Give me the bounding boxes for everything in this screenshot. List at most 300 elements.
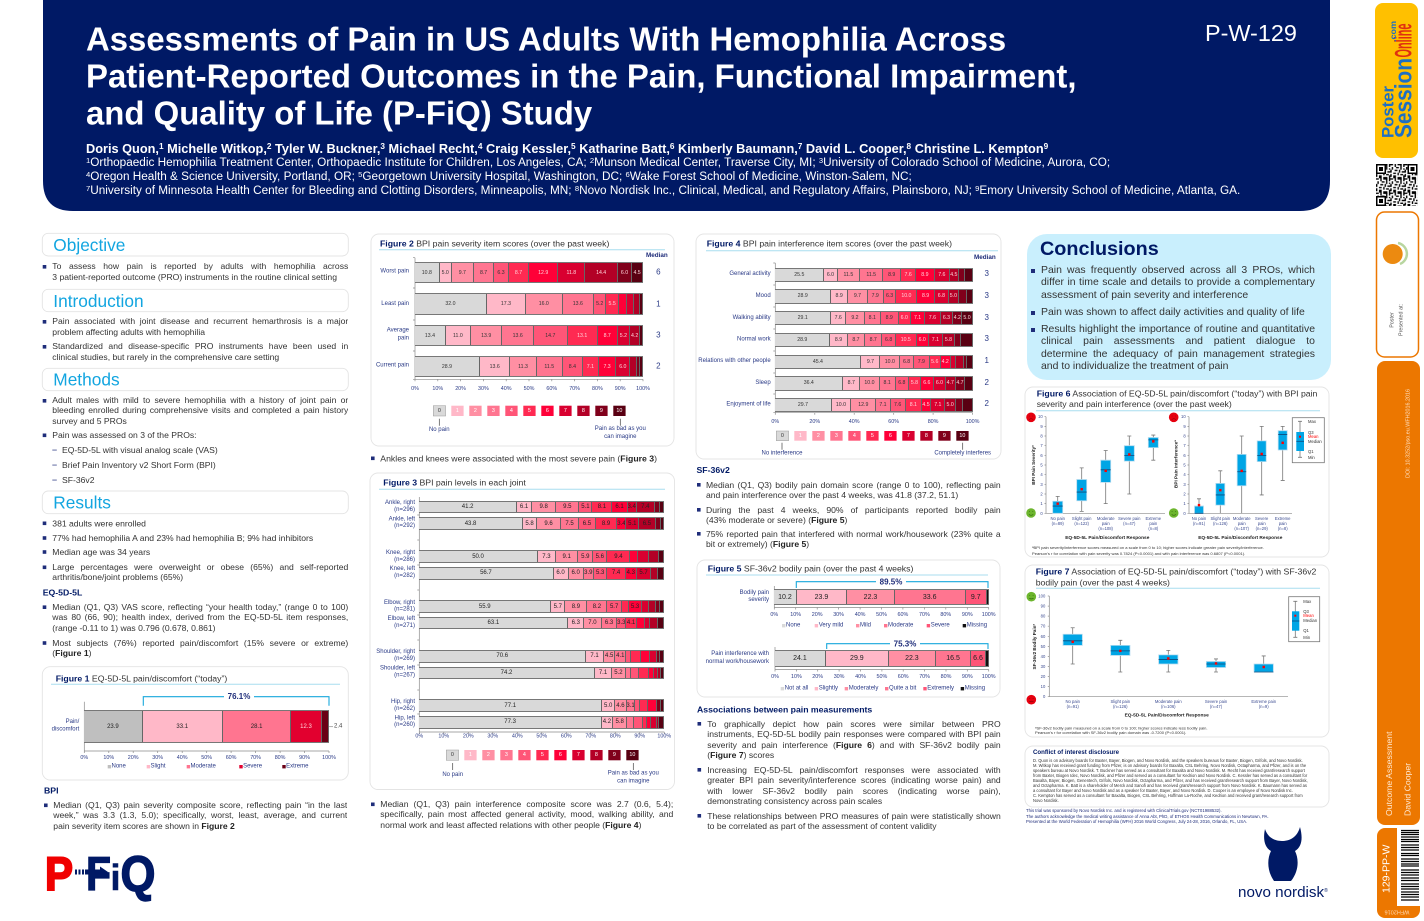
axis labels: 20%: [809, 419, 820, 425]
logo: Novo Nordisk: [1238, 827, 1328, 901]
bar: hip left: Hip, left: [395, 716, 415, 722]
footnote: Pearson’s r for correlation with pain severity was 0.7824 (P<0.0001) and with pain interference was 0.6807 (P<0.0001).: [1032, 551, 1245, 556]
text: EQ-5D-5L bullet 2: (Figure 1): [52, 648, 91, 658]
legend: pain scale: 9: [613, 752, 616, 758]
bar: hip left: (n=260): [394, 722, 415, 728]
legend: interference scale: 0: [781, 433, 784, 439]
conflict heading: Conflict of interest disclosure: [1033, 749, 1120, 756]
bar: general activity: 3: [984, 269, 989, 278]
legend: pain scale: 5: [528, 408, 531, 414]
chart: pain severity box plot: No pain: [1050, 516, 1066, 521]
chart: pain severity box plot: pain: [1149, 521, 1158, 526]
bar: knee right: Knee, right: [386, 550, 415, 556]
bar: sleep: 2: [984, 378, 989, 387]
bar: knee right: 9.1: [562, 554, 571, 560]
bar: walking ability: 6.0: [901, 315, 908, 321]
axis a: [774, 586, 989, 610]
bar: average pain: 13.9: [481, 332, 491, 338]
title: and Quality of Life (P-FiQ) Study: [86, 94, 593, 132]
conflict text: Novo Nordisk.: [1033, 798, 1059, 803]
legend: box plot key: [1289, 597, 1320, 642]
text: EQ-5D-5L bullet 2: [43, 638, 348, 660]
bar: enjoyment of life: 8.1: [910, 402, 917, 408]
bar: mood: Mood: [756, 293, 771, 299]
bar: knee right: 5.9: [581, 554, 589, 560]
bar: worst pain: 8.7: [515, 270, 522, 276]
conclusions heading: Conclusions: [1040, 238, 1159, 260]
text: results bullets: 77% had hemophilia A and 23% had hemophilia B; 9% had inhibitors: [52, 533, 313, 543]
bar: bodily pain severity: 10.2: [778, 594, 792, 600]
bar: hip right: (n=262): [394, 706, 415, 712]
bar: average pain: 8.7: [604, 332, 611, 338]
text: introduction bullet 1: problem affecting adults with hemophilia: [52, 326, 205, 336]
bar: elbow right: 55.9: [479, 604, 491, 610]
text: results bullets: Large percentages were overweight or obese (65%) and self-reported: [52, 562, 348, 572]
legend: pain scale: 2: [474, 408, 477, 414]
chart: SF-36v2 box plot: (n=126): [1113, 704, 1128, 709]
bar: current pain: Current pain: [376, 363, 409, 369]
text: associations bullet 2: with lower SF-36v2 bodily pain scores (indicating worse pain),: [707, 786, 1001, 796]
chart: pain severity box plot: 1: [1040, 501, 1043, 506]
legend: [108, 764, 309, 770]
chart: pain severity box plot: 5: [1040, 462, 1043, 468]
bar: normal work: 8.7: [870, 337, 877, 343]
footnote: ᵃBPI pain severity/interference scores measured on a scale from 0 to 10; higher scores indicate greater pain severity/interference.: [1032, 545, 1264, 550]
bar: knee left: 7.4: [612, 570, 620, 576]
bar: ankle left: 3.4: [617, 521, 626, 527]
legend b: Moderately: [849, 686, 878, 692]
bar: sleep: 4.7: [956, 380, 964, 386]
legend: box plot key: [1292, 418, 1324, 463]
text: PRO list: SF-36v2: [62, 475, 95, 485]
chart: SF-36v2 box plot: a: [1031, 624, 1035, 626]
chart: pain severity box plot: (n=89): [1052, 521, 1064, 526]
axis labels: 0%: [80, 755, 88, 761]
bar: elbow left: 6.3: [572, 620, 580, 626]
bar: knee left: 5.7: [639, 570, 648, 576]
text: methods bullet 2: [43, 430, 348, 441]
bar: knee right: 7.3: [542, 554, 551, 560]
axis labels: 100%: [322, 755, 336, 761]
sidebar: poster code and barcode: [1377, 828, 1420, 918]
legend a: Moderate: [888, 623, 914, 629]
sidebar: orange info panel: DOI: 10.3252/pso.eu.WFH2016.2016: [1406, 389, 1412, 478]
bar: hip left: [394, 716, 664, 729]
legend a: [782, 623, 987, 629]
text: pain interference composite: normal work and least affected relations with other people (Figure 4): [380, 820, 641, 830]
bar: ankle right: (n=296): [394, 507, 415, 513]
axis labels: 80%: [928, 419, 939, 425]
axis labels: 100%: [966, 419, 980, 425]
bar: normal work: 6.0: [919, 337, 926, 343]
legend: interference scale: 3: [835, 433, 838, 439]
legend: Slight: [150, 764, 166, 770]
text: SF-36v2 bullet 2: During the past 4 weeks, 90% of participants reported bodily pain: [706, 505, 1001, 515]
bar: shoulder right: 7.1: [590, 653, 599, 659]
text: PRO list: Brief Pain Inventory v2 Short Form (BPI): [62, 460, 216, 470]
text: associations bullet 1: To graphically depict how pain scores were similar between PRO: [707, 719, 1001, 729]
axis labels: 10%: [432, 386, 443, 392]
legend: interference scale: 8: [925, 433, 928, 439]
bar: shoulder left: [380, 666, 664, 679]
icon: WFH congress logo: [1383, 243, 1407, 264]
legend: pain scale: 8: [595, 752, 598, 758]
figure 4 title: Figure 4 BPI pain interference item scores (over the past week): [707, 238, 952, 248]
chart: pain interference box plot: 4: [1183, 472, 1186, 477]
heading: Introduction: Introduction: [53, 291, 144, 311]
text: associations bullet 3: [698, 811, 1001, 833]
axis labels: 0%: [771, 419, 779, 425]
chart: SF-36v2 box plot: 20: [1041, 674, 1046, 679]
bar: general activity: 25.5: [794, 272, 804, 278]
text: SF-36v2 bullet 3: bit or extremely) (Figure 5): [706, 539, 809, 549]
sidebar: PosterSessionOnline logo: Poster: [1378, 86, 1397, 138]
bar: pain interference: 22.3: [905, 655, 919, 662]
axis labels a: 80%: [940, 612, 951, 618]
bar: normal work: 8.7: [852, 337, 860, 343]
sidebar: PosterSessionOnline logo: [1375, 3, 1418, 158]
bar: hip right: Hip, right: [391, 699, 415, 705]
bar: elbow right: Elbow, right: [384, 600, 415, 606]
bar: normal work: 3: [984, 334, 989, 343]
axis labels a: 70%: [919, 612, 930, 618]
text: sponsorship and acknowledgements: The authors acknowledge the medical writing assistance of Anna Abt, PhD, of ETHOS Health Communications in Newtown, PA.: [1026, 814, 1269, 819]
title: Patient-Reported Outcomes in the Pain, Functional Impairment,: [86, 58, 1076, 94]
bar: elbow left: 6.3: [605, 620, 613, 626]
bar: least pain: 13.6: [573, 301, 583, 307]
bar: current pain: 11.5: [544, 364, 554, 370]
legend anchors: Pain as bad as you: [608, 770, 659, 776]
bar: pain interference: 16.5: [946, 655, 960, 662]
bar: ankle left: 43.8: [465, 521, 476, 527]
axis labels: 30%: [152, 755, 163, 761]
heading: Results: [42, 491, 348, 514]
stacked bar: pain/discomfort: 28.1: [251, 724, 262, 730]
axis labels a: 40%: [855, 612, 866, 618]
bar: elbow right: (n=281): [394, 606, 415, 612]
chart: pain interference box plot: pain: [1279, 521, 1287, 526]
bar: elbow right: 8.9: [572, 604, 580, 610]
axis labels: 90%: [615, 386, 626, 392]
bar: mood: [756, 289, 989, 304]
axis labels: 60%: [888, 419, 899, 425]
axis labels: 60%: [226, 755, 237, 761]
legend a: Missing: [967, 623, 987, 629]
logo: P-FiQ: F: [86, 847, 111, 900]
bar: general activity: 11.5: [866, 272, 876, 278]
legend anchors: can imagine: [617, 779, 650, 785]
bar: walking ability: 6.3: [943, 315, 950, 321]
bar: worst pain: 12.9: [538, 270, 548, 276]
legend a: Severe: [931, 623, 950, 629]
bracket: 89.5%: 89.5%: [880, 578, 902, 586]
text: pain interference composite: [371, 799, 673, 832]
panel: Figure 1: [42, 667, 348, 780]
chart: pain interference box plot: [1173, 414, 1292, 541]
median heading: Median: [646, 252, 668, 259]
category label: [52, 719, 80, 733]
bar: enjoyment of life: 7.1: [934, 402, 941, 408]
heading: EQ-5D-5L: EQ-5D-5L: [43, 587, 83, 597]
label: 2.4: 2.4: [334, 724, 343, 730]
bar: ankle right: 41.2: [462, 504, 473, 510]
bar: general activity: General activity: [729, 271, 771, 277]
legend a: Very mild: [819, 623, 843, 629]
chart: pain interference box plot: a: [1173, 440, 1177, 442]
bar: knee left: [390, 566, 664, 580]
footnote: Pearson’s r for correlation with SF-36v2 bodily pain domain was -0.7200 (P<0.0001).: [1035, 730, 1186, 735]
heading: Objective: [42, 233, 348, 256]
axis labels: 10%: [438, 734, 449, 740]
bar: ankle right: 9.8: [540, 504, 548, 510]
bar: sleep: 8.7: [848, 380, 855, 386]
text: associations bullet 2: [698, 765, 1001, 809]
text: ankles and knees: Ankles and knees were associated with the most severe pain (Figure 3): [380, 453, 657, 463]
bar: knee left: (n=282): [394, 573, 415, 579]
conclusions bullet 3: clinical pain assessments and patient dialogue to: [1041, 336, 1315, 347]
text: BPI bullet: pain severity item scores are shown in Figure 2: [53, 821, 235, 831]
axis labels: 40%: [177, 755, 188, 761]
panel: Figure 6: [1025, 387, 1329, 557]
chart: pain interference box plot: pain: [1238, 521, 1246, 526]
chart: SF-36v2 box plot: EQ-5D-5L Pain/Discomfort Response: [1125, 712, 1209, 718]
bar: sleep: Sleep: [755, 380, 771, 386]
chart: pain interference box plot: (n=107): [1234, 526, 1250, 531]
bar: average pain: 13.6: [513, 332, 523, 338]
axis labels: 70%: [250, 755, 261, 761]
legend: box plot key: Q3: [1303, 609, 1310, 614]
bar: pain interference: normal work/housework: [706, 659, 770, 665]
bar: least pain: 32.0: [445, 301, 455, 307]
bar: worst pain: 9.7: [459, 270, 466, 276]
legend: pain scale: 7: [564, 408, 567, 414]
chart: pain severity box plot: pain: [1102, 521, 1110, 526]
bar: current pain: 2: [656, 362, 661, 370]
chart: pain severity box plot: 4: [1040, 472, 1043, 477]
sidebar: poster code and barcode: WFH2016: [1385, 909, 1409, 915]
axis labels b: 40%: [855, 674, 866, 680]
chart: SF-36v2 box plot: 70: [1041, 624, 1046, 629]
legend anchors: Pain as bad as you: [595, 426, 646, 432]
axis labels: 0%: [411, 386, 419, 392]
axis labels: 70%: [569, 386, 580, 392]
text: methods bullet 1: bleeding enrolled during comprehensive visits and completed a pain history: [52, 405, 348, 415]
sidebar: orange info panel: Outcome Assessment: [1384, 731, 1394, 816]
bar: knee right: 5.6: [596, 554, 604, 560]
bar: general activity: 7.6: [905, 272, 912, 278]
panel: Figure 7: [1025, 565, 1329, 737]
legend anchors: No pain: [429, 427, 450, 433]
bar: shoulder right: [376, 649, 664, 663]
legend: pain scale: [433, 406, 626, 416]
figure 7 title: Figure 7 Association of EQ-5D-5L pain/discomfort (“today”) with SF-36v2: [1036, 567, 1317, 577]
bar: relations with other people: 9.7: [867, 359, 874, 365]
bar: sleep: 5.8: [911, 380, 918, 386]
bar: least pain: 1: [656, 300, 661, 308]
legend: box plot key: Q3: [1308, 430, 1314, 435]
text: objective: [43, 261, 348, 283]
conflict text: Baxalta, Bayer, Biogen, Genentech, Grifols, Novo Nordisk, Octapharma, and Pfizer, and has received grant/research support from Bayer, Novo Nordisk,: [1033, 778, 1308, 783]
conflict text: C. Kempton has served as a consultant for Baxalta, Biogen, CSL Behring, Hoffman La-Roche, and Kedrion and received grant/research support from: [1033, 793, 1303, 798]
sidebar: presented at box: Presented at:: [1398, 304, 1404, 336]
legend: pain scale: 2: [487, 752, 490, 758]
bar: relations with other people: 7.9: [918, 359, 925, 365]
bar: least pain: Least pain: [381, 301, 409, 307]
axis labels: 40%: [512, 734, 523, 740]
text: associations bullet 2: Increasing EQ-5D-5L pain/discomfort responses were associated with: [707, 765, 1001, 775]
bar: ankle left: 9.6: [544, 521, 553, 527]
bar: knee left: 4.3: [627, 570, 635, 576]
chart: SF-36v2 box plot: Moderate pain: [1155, 699, 1182, 704]
logo: P-FiQ: Q: [120, 846, 156, 902]
bar: hip right: 77.1: [504, 703, 516, 709]
sidebar: presented at box: Poster: [1390, 312, 1396, 328]
bar: walking ability: 7.6: [835, 315, 842, 321]
legend: pain scale: 4: [510, 408, 513, 414]
chart: pain interference box plot: pain: [1258, 521, 1266, 526]
bar: general activity: 8.9: [921, 272, 929, 278]
bar: relations with other people: Relations with other people: [698, 358, 771, 364]
axis labels: 30%: [478, 386, 489, 392]
text: pain interference composite: Median (Q1, Q3) pain interference composite score was 2.7 (0.6, 5.4);: [380, 799, 673, 809]
axis labels b: [771, 674, 996, 680]
legend: pain scale: 9: [600, 408, 603, 414]
bar: sleep: 10.0: [864, 380, 875, 386]
legend: pain scale: 1: [469, 752, 472, 758]
legend: pain scale: 0: [451, 752, 454, 758]
bar: elbow right: [384, 600, 664, 613]
axis labels: 40%: [849, 419, 860, 425]
bar: ankle right: 8.1: [598, 504, 606, 510]
bar: shoulder left: 74.2: [501, 670, 512, 676]
bar: mood: 8.9: [922, 293, 929, 299]
legend: pain scale: [446, 750, 639, 760]
bar: knee left: 56.7: [480, 570, 492, 576]
category label: discomfort: [52, 727, 80, 733]
legend: pain scale: 0: [438, 408, 441, 414]
chart: pain severity box plot: 8: [1040, 434, 1043, 438]
bar: least pain: [381, 293, 661, 315]
figure 7 title: [1036, 567, 1317, 587]
text: introduction bullet 1: [43, 316, 348, 338]
axis labels b: 80%: [941, 674, 952, 680]
chart: SF-36v2 box plot: 10: [1041, 684, 1046, 689]
axis labels: [411, 386, 650, 392]
bar: normal work: Normal work: [737, 336, 772, 342]
legend: pain scale: 6: [546, 408, 549, 414]
bar: least pain: 5.2: [596, 301, 603, 307]
legend b: Extremely: [927, 686, 954, 692]
bar: average pain: [387, 325, 661, 346]
category label: Pain/: [66, 719, 80, 725]
logo: Novo Nordisk: ®: [1324, 887, 1328, 894]
heading: Introduction: [42, 289, 348, 312]
axis labels: 100%: [636, 386, 650, 392]
bar: general activity: [729, 268, 989, 282]
bar: worst pain: 14.4: [596, 270, 606, 276]
chart: pain interference box plot: 5: [1183, 462, 1186, 468]
bar: ankle right: [385, 500, 664, 513]
text: PRO list: [52, 445, 218, 485]
stacked bar: pain/discomfort: [84, 710, 329, 743]
bar: average pain: 13.4: [425, 332, 435, 338]
axis labels a: 20%: [812, 612, 823, 618]
text: associations bullet 1: [698, 719, 1001, 763]
text: BPI bullet: week,” was 3.3 (1.3, 5.0); specifically, worst, least, average, and current: [53, 810, 347, 820]
bar: average pain: Average: [387, 328, 410, 334]
axis labels: 80%: [610, 734, 621, 740]
conflict text: [1033, 758, 1327, 806]
bar: ankle right: 9.5: [563, 504, 571, 510]
bar: pain interference: Pain interference with: [711, 651, 769, 657]
bar: mood: 6.3: [886, 293, 893, 299]
bar: mood: 3: [984, 291, 989, 300]
text: methods bullet 2: Pain was assessed on 3 of the PROs:: [52, 430, 197, 440]
legend: interference scale: 1: [799, 433, 802, 439]
heading: Methods: [42, 368, 348, 391]
conclusions bullet 2: Pain was shown to affect daily activities and quality of life: [1041, 307, 1305, 318]
bar: hip right: [391, 699, 664, 712]
bar: current pain: 8.4: [569, 364, 576, 370]
axis labels a: 100%: [982, 612, 996, 618]
bar: enjoyment of life: Enjoyment of life: [726, 402, 771, 408]
bar: mood: 7.9: [872, 293, 879, 299]
legend: pain scale: 5: [541, 752, 544, 758]
title: [86, 20, 1076, 132]
axis labels: [771, 419, 980, 425]
bar: mood: 8.9: [836, 293, 843, 299]
bar: mood: 9.7: [854, 293, 861, 299]
bar: average pain: 13.1: [577, 332, 587, 338]
text: EQ-5D-5L bullet 1: [43, 602, 348, 635]
logo: P-FiQ: i: [110, 857, 120, 898]
median heading: Median: [974, 254, 996, 261]
legend a: Mild: [860, 623, 871, 629]
text: PRO list: EQ-5D-5L with visual analog scale (VAS): [62, 445, 218, 455]
bar: normal work: 6.8: [885, 337, 892, 343]
legend: interference scale: 6: [889, 433, 892, 439]
bar: enjoyment of life: 29.7: [798, 402, 808, 408]
bar: current pain: 7.1: [587, 364, 594, 370]
panel: conflict of interest: [1025, 746, 1329, 807]
conclusions bullet 3: [1031, 324, 1315, 375]
bar: shoulder right: 4.5: [605, 653, 613, 659]
bar: elbow left: 63.1: [488, 620, 499, 626]
axis labels: [80, 755, 336, 761]
bar: shoulder left: 5.2: [614, 670, 623, 676]
bar: normal work: 7.1: [932, 337, 939, 343]
chart: pain severity box plot: 0: [1040, 511, 1043, 516]
text: introduction bullet 2: clinical studies, but rarely in the comprehensive care setting: [52, 352, 279, 362]
legend: pain scale: 3: [505, 752, 508, 758]
legend anchors: No interference: [761, 451, 803, 457]
bar: worst pain: [380, 262, 661, 283]
bar: elbow left: (n=271): [394, 623, 415, 629]
legend: Severe: [243, 764, 263, 770]
bar: ankle right: 6.1: [615, 504, 624, 510]
text: EQ-5D-5L bullet 1: (range -0.11 to 1) was 0.796 (0.678, 0.861): [52, 623, 216, 633]
heading: Objective: Objective: [53, 235, 125, 255]
axis: [417, 497, 664, 734]
text: results bullets: [43, 518, 348, 584]
conclusions bullet 3: and to individualize the treatment of pain: [1041, 361, 1228, 372]
text: EQ-5D-5L bullet 2: Most subjects (76%) reported pain/discomfort (15% severe or extreme): [52, 638, 348, 648]
text: SF-36v2 bullet 3: [697, 529, 1001, 551]
bar: shoulder left: 7.1: [599, 670, 607, 676]
bar: average pain: 3: [656, 330, 661, 340]
text: BPI bullet: Median (Q1, Q3) pain severity composite score, reflecting pain “in the last: [53, 800, 347, 810]
conclusions bullet 1: [1031, 265, 1315, 303]
